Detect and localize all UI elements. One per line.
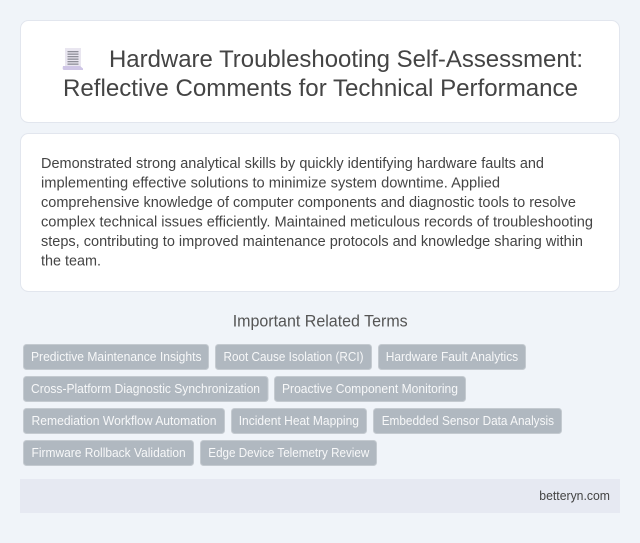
tag <box>274 376 466 402</box>
tag: Remediation Workflow Automation <box>32 413 216 428</box>
tag <box>200 440 376 466</box>
title <box>63 46 583 102</box>
tag: Embedded Sensor Data Analysis <box>382 413 554 428</box>
tag <box>24 440 194 466</box>
tag <box>378 344 526 370</box>
tag <box>24 408 224 434</box>
tag <box>374 408 562 434</box>
tag <box>232 408 366 434</box>
tag: Incident Heat Mapping <box>239 413 359 428</box>
title: Hardware Troubleshooting Self-Assessment: <box>109 46 583 73</box>
panel: header card <box>20 20 620 122</box>
title: Reflective Comments for Technical Performance <box>63 75 578 102</box>
icon: document scroll <box>63 48 83 70</box>
text block: reflective comment: comprehensive knowledge of computer components and diagnostic tools to resolve <box>41 195 576 211</box>
tag <box>216 344 372 370</box>
tag: Edge Device Telemetry Review <box>208 445 370 460</box>
text block: reflective comment <box>41 156 593 270</box>
tag list <box>24 344 562 466</box>
tag: Root Cause Isolation (RCI) <box>224 349 364 364</box>
tag: Predictive Maintenance Insights <box>31 349 202 364</box>
tag: Hardware Fault Analytics <box>386 349 518 364</box>
footer source: betteryn.com <box>539 488 610 503</box>
panel: assessment text <box>20 134 620 292</box>
heading: related terms: Important Related Terms <box>233 312 408 330</box>
footer bar <box>20 479 620 513</box>
tag: Cross-Platform Diagnostic Synchronization <box>31 381 260 396</box>
text block: reflective comment: Demonstrated strong analytical skills by quickly identifying hardware faults and <box>41 156 544 172</box>
tag: Firmware Rollback Validation <box>32 445 186 460</box>
tag: Proactive Component Monitoring <box>282 381 458 396</box>
text block: reflective comment: complex technical issues efficiently. Maintained meticulous records of troubleshooting <box>41 214 593 230</box>
tag <box>24 344 208 370</box>
tag <box>24 376 268 402</box>
text block: reflective comment: steps, contributing to improved maintenance protocols and knowledge sharing within <box>41 234 583 250</box>
text block: reflective comment: implementing effective solutions to minimize system downtime. Applied <box>41 176 500 192</box>
text block: reflective comment: the team. <box>41 254 101 270</box>
